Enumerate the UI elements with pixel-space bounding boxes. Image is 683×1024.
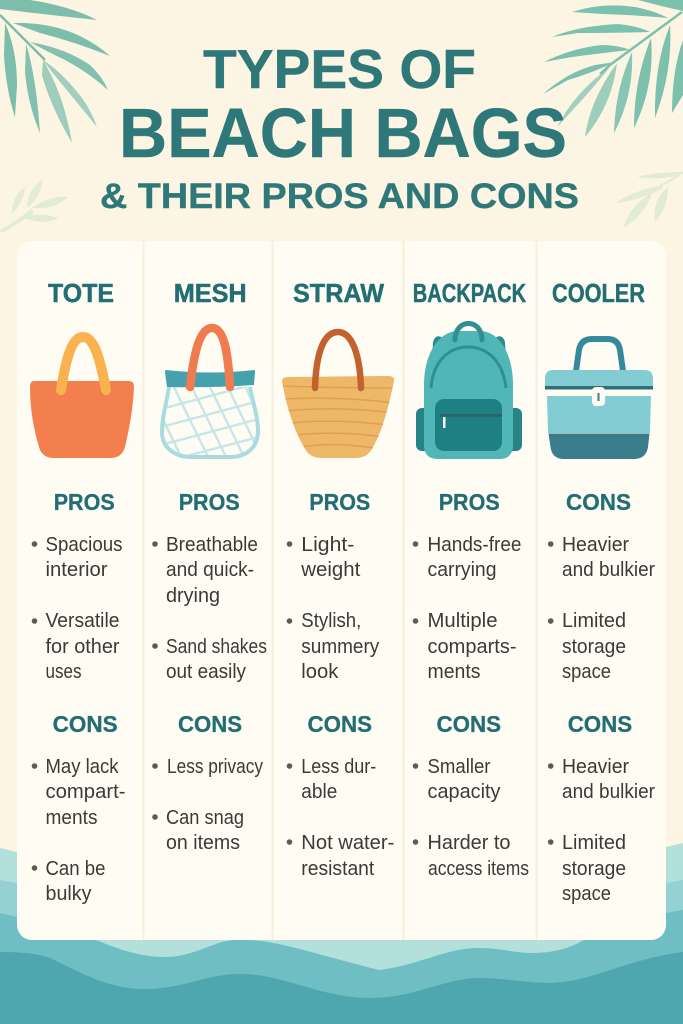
straw cons heading: CONS bbox=[308, 711, 372, 737]
backpack pros list: Multiple bbox=[428, 609, 498, 632]
icon: cooler bbox=[545, 339, 653, 459]
cooler cons list: space bbox=[562, 882, 611, 905]
tote cons list bbox=[32, 755, 126, 905]
mesh cons list: Less privacy bbox=[167, 755, 264, 778]
straw cons list: able bbox=[301, 780, 337, 803]
backpack cons list: Harder to bbox=[428, 831, 510, 854]
mesh cons heading: CONS bbox=[178, 711, 242, 737]
mesh pros list bbox=[152, 533, 267, 683]
backpack cons list: capacity bbox=[428, 780, 501, 803]
mesh heading: MESH bbox=[174, 278, 247, 308]
title line: beach bags: BEACH BAGS bbox=[119, 94, 567, 172]
cooler heading: COOLER bbox=[552, 278, 645, 308]
tote pros list: Versatile bbox=[46, 609, 120, 632]
tote cons list: ments bbox=[46, 806, 98, 829]
tote cons list: compart- bbox=[46, 780, 126, 803]
cooler cons list: storage bbox=[562, 857, 626, 880]
tote cons heading: CONS bbox=[53, 711, 118, 737]
cooler upper list: space bbox=[562, 660, 611, 683]
faint leaf bottom right bbox=[615, 172, 683, 228]
backpack cons heading: CONS bbox=[436, 711, 501, 737]
straw pros list: Stylish, bbox=[301, 609, 361, 632]
backpack cons list: Smaller bbox=[428, 755, 491, 778]
panel: tote bbox=[30, 278, 134, 905]
tote cons list: May lack bbox=[46, 755, 119, 778]
faint leaf bottom left bbox=[0, 180, 68, 233]
mesh pros list: Sand shakes bbox=[166, 635, 267, 658]
mesh pros list: Breathable bbox=[166, 533, 258, 556]
tote pros list: for other bbox=[46, 635, 120, 658]
panel: mesh bbox=[150, 278, 270, 854]
backpack heading: BACKPACK bbox=[413, 278, 526, 308]
panel: straw bbox=[282, 278, 394, 880]
cooler upper list: Limited bbox=[562, 609, 626, 632]
icon: tote bag bbox=[30, 337, 134, 458]
cooler pros-slot heading: CONS bbox=[566, 489, 631, 515]
tote pros list: Spacious bbox=[46, 533, 122, 556]
main card bbox=[17, 241, 666, 940]
panel: backpack bbox=[413, 278, 529, 880]
straw pros list: Light- bbox=[301, 533, 354, 556]
straw cons list: resistant bbox=[301, 857, 375, 880]
palm leaves top right bbox=[543, 0, 683, 137]
palm leaves top left bbox=[0, 0, 110, 143]
straw pros list: weight bbox=[300, 558, 361, 581]
straw cons list: Not water- bbox=[301, 831, 394, 854]
straw cons list bbox=[287, 755, 394, 880]
tote cons list: Can be bbox=[46, 857, 106, 880]
mesh pros list: and quick- bbox=[166, 558, 254, 581]
tote pros list: uses bbox=[46, 660, 82, 683]
mesh cons list bbox=[152, 755, 264, 854]
backpack pros list bbox=[413, 533, 522, 683]
cooler upper list: and bulkier bbox=[562, 558, 655, 581]
straw pros list: look bbox=[301, 660, 339, 683]
cooler cons list: Heavier bbox=[562, 755, 629, 778]
icon: straw bag bbox=[282, 332, 394, 458]
straw pros list bbox=[287, 533, 380, 683]
backpack pros list: Hands-free bbox=[428, 533, 522, 556]
backpack cons list: access items bbox=[428, 857, 529, 880]
title bbox=[100, 38, 579, 216]
cooler cons list: and bulkier bbox=[562, 780, 655, 803]
mesh cons list: Can snag bbox=[166, 806, 244, 829]
waves bbox=[0, 843, 683, 1024]
tote pros list bbox=[32, 533, 123, 683]
tote cons list: bulky bbox=[46, 882, 92, 905]
mesh pros heading: PROS bbox=[179, 489, 240, 515]
cooler cons list bbox=[548, 755, 655, 905]
tote pros heading: PROS bbox=[54, 489, 115, 515]
icon: mesh bag bbox=[160, 324, 260, 459]
tote heading: TOTE bbox=[48, 278, 114, 308]
straw heading: STRAW bbox=[293, 278, 384, 308]
cooler cons list: Limited bbox=[562, 831, 626, 854]
mesh pros list: out easily bbox=[166, 660, 247, 683]
cooler upper list bbox=[548, 533, 655, 683]
backpack pros heading: PROS bbox=[439, 489, 500, 515]
backpack cons list bbox=[413, 755, 529, 880]
cooler upper list: storage bbox=[562, 635, 626, 658]
title line: types of: TYPES OF bbox=[203, 38, 476, 100]
subtitle: & THEIR PROS AND CONS bbox=[100, 177, 579, 216]
backpack pros list: comparts- bbox=[428, 635, 516, 658]
mesh pros list: drying bbox=[166, 584, 220, 607]
straw cons list: Less dur- bbox=[301, 755, 376, 778]
tote pros list: interior bbox=[46, 558, 108, 581]
panel: cooler bbox=[545, 278, 655, 905]
straw pros list: summery bbox=[301, 635, 380, 658]
straw pros heading: PROS bbox=[309, 489, 370, 515]
cooler cons heading: CONS bbox=[568, 711, 632, 737]
cooler upper list: Heavier bbox=[562, 533, 629, 556]
backpack pros list: carrying bbox=[428, 558, 496, 581]
mesh cons list: on items bbox=[166, 831, 240, 854]
backpack pros list: ments bbox=[428, 660, 480, 683]
icon: backpack bbox=[416, 324, 522, 459]
